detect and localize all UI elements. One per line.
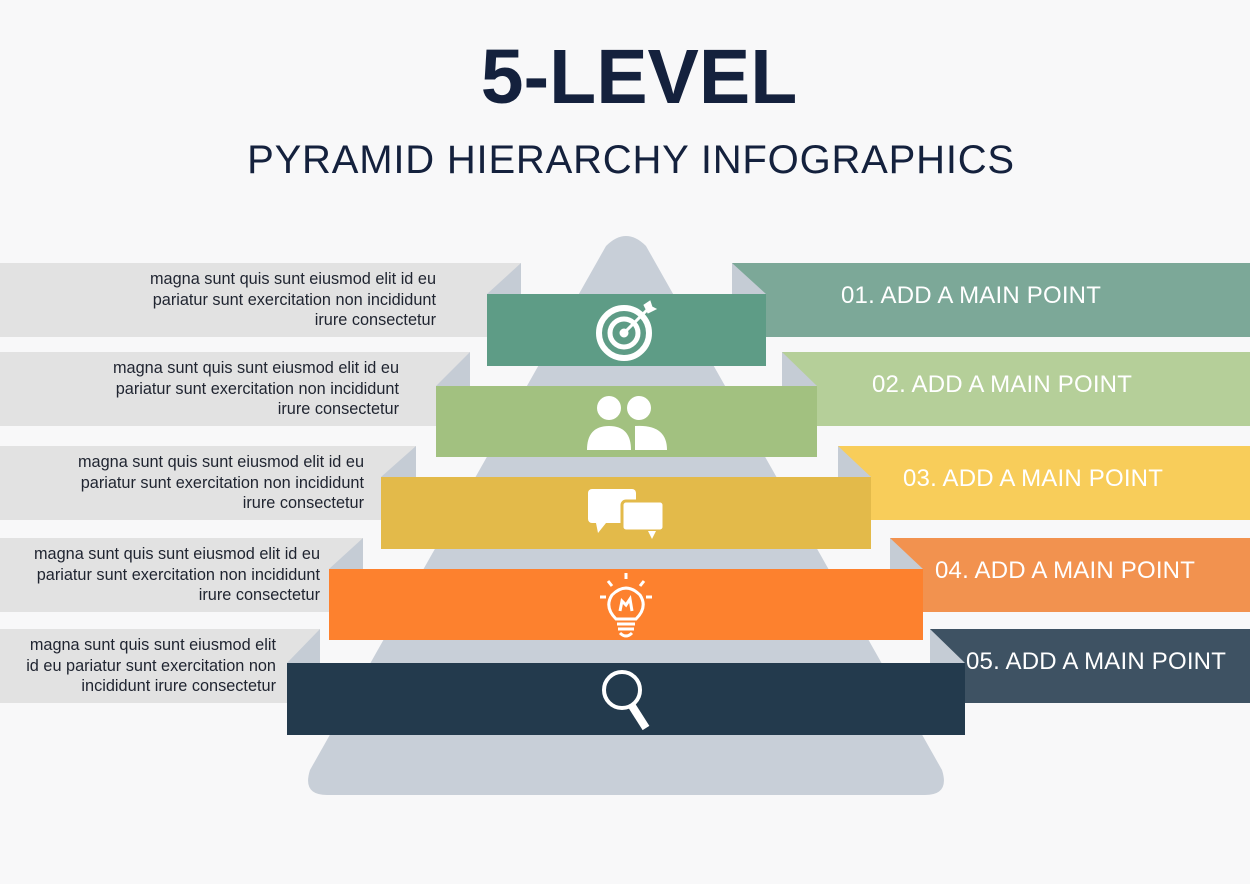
left text boxes: [0, 263, 521, 337]
text: magna sunt quis sunt eiusmod elit id eu: [78, 453, 364, 471]
text: pariatur sunt exercitation non incididunt: [81, 474, 364, 492]
text: pariatur sunt exercitation non incididunt: [116, 380, 399, 398]
level 5 bar: magnifier icon: [287, 663, 965, 735]
text: 02. ADD A MAIN POINT: [872, 371, 1132, 398]
level 1 bar: target icon: [487, 294, 766, 366]
text: irure consectetur: [278, 400, 399, 418]
level 3 bar: chat icon: [381, 477, 871, 549]
text: incididunt irure consectetur: [81, 677, 276, 695]
text: irure consectetur: [199, 586, 320, 604]
title: 5-LEVEL: [481, 34, 797, 120]
text: magna sunt quis sunt eiusmod elit id eu: [34, 545, 320, 563]
text: irure consectetur: [243, 494, 364, 512]
subtitle: PYRAMID HIERARCHY INFOGRAPHICS: [247, 138, 1015, 182]
text: id eu pariatur sunt exercitation non: [26, 656, 276, 674]
left text boxes: magna sunt quis sunt eiusmod elit id eu: [150, 270, 436, 288]
left text boxes: pariatur sunt exercitation non incididunt: [153, 290, 436, 308]
right labels: [732, 263, 1250, 337]
level 4 bar: lightbulb icon: [329, 569, 923, 640]
text: pariatur sunt exercitation non incididunt: [37, 566, 320, 584]
text: 03. ADD A MAIN POINT: [903, 465, 1163, 492]
text: 05. ADD A MAIN POINT: [966, 648, 1226, 675]
right labels: 01. ADD A MAIN POINT: [841, 282, 1101, 309]
text: magna sunt quis sunt eiusmod elit id eu: [113, 359, 399, 377]
text: 04. ADD A MAIN POINT: [935, 557, 1195, 584]
text: magna sunt quis sunt eiusmod elit: [30, 636, 276, 654]
left text boxes: irure consectetur: [315, 311, 436, 329]
level 2 bar: people icon: [436, 386, 817, 457]
